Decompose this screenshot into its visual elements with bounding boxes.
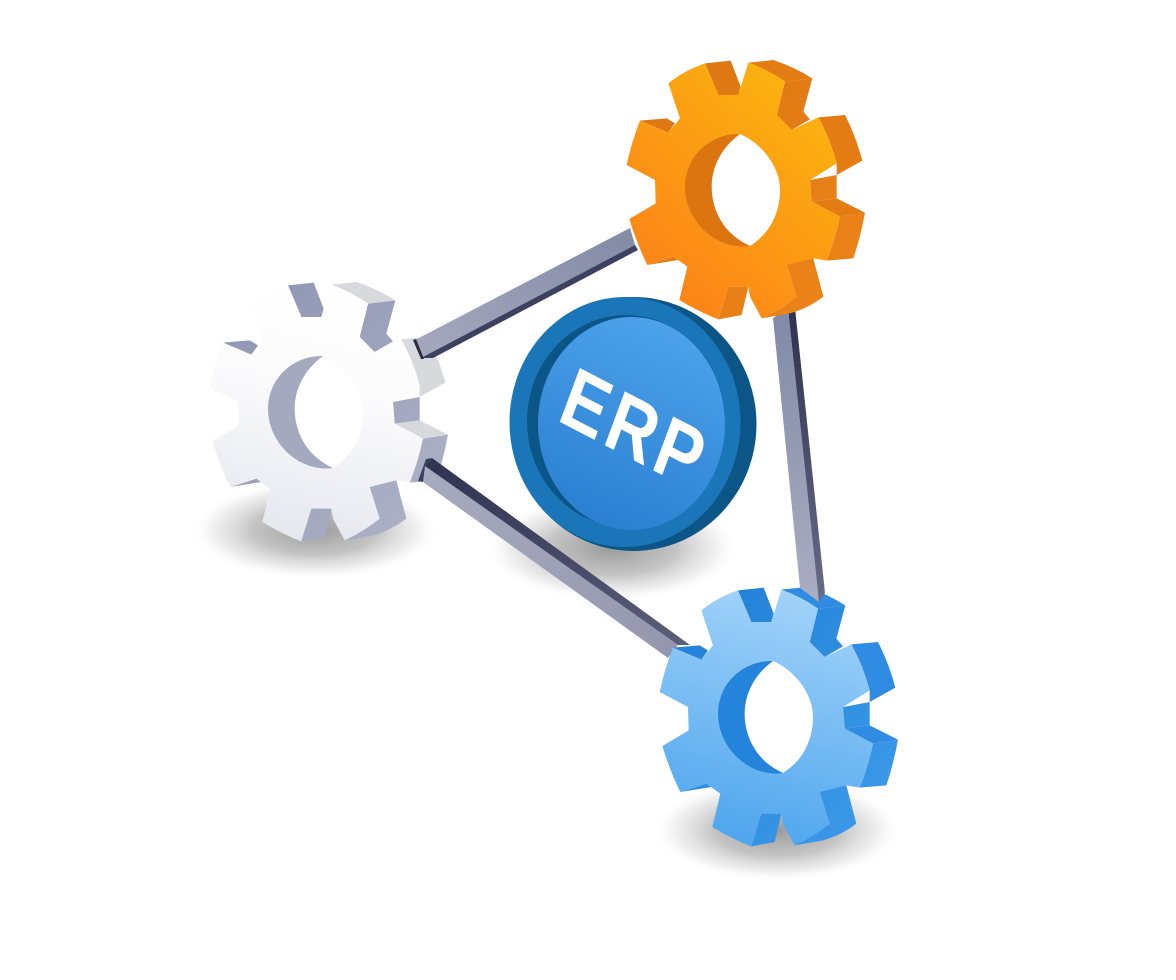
arrow: connector rod white gear to blue gear: [418, 458, 690, 658]
icon: blue gear: [660, 587, 898, 846]
label: ERP: ERP: [549, 349, 720, 509]
shadow: white gear: [190, 480, 440, 580]
arrow: connector rod white gear to orange gear: [413, 228, 638, 359]
icon: orange gear: [627, 60, 865, 319]
icon: ERP coin: [510, 297, 756, 551]
arrow: connector rod orange gear to blue gear: [773, 308, 825, 602]
icon: white gear: [210, 282, 448, 541]
shadow: blue gear: [652, 778, 902, 882]
coin inner bevel: [527, 315, 725, 527]
coin face: [538, 317, 725, 530]
coin rim: [510, 297, 740, 547]
coin edge: [510, 297, 756, 551]
shadow: ERP disc: [484, 494, 740, 602]
